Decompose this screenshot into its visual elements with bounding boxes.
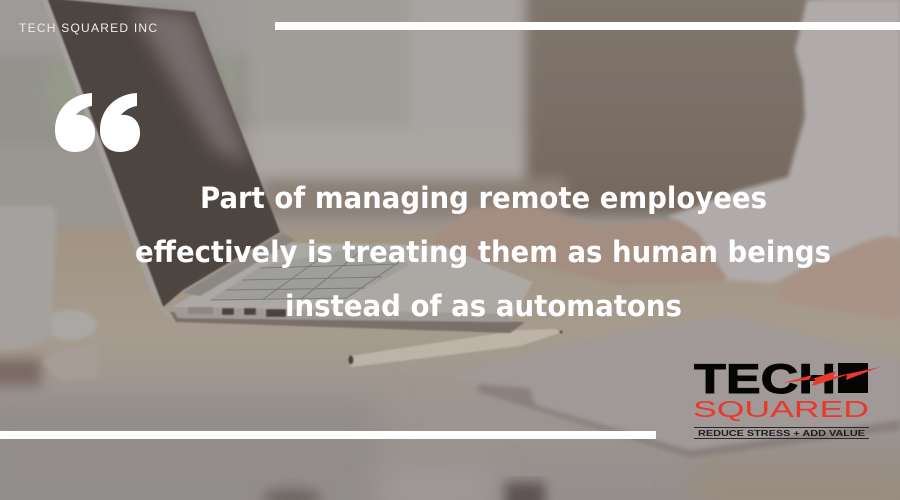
quote text: Part of managing remote employees <box>200 181 767 215</box>
logo tagline: REDUCE STRESS + ADD VALUE <box>698 429 866 438</box>
quote text <box>135 181 831 323</box>
quote text: effectively is treating them as human beings <box>135 235 831 269</box>
laptop <box>42 0 533 333</box>
bottom white rule <box>0 431 656 439</box>
quote text: instead of as automatons <box>285 289 682 323</box>
notebook <box>450 316 900 458</box>
logo black square <box>838 363 868 393</box>
hand on trackpad <box>428 205 727 285</box>
icon: quotation marks <box>55 93 140 152</box>
keyboard keys <box>210 252 405 300</box>
bottom dark blurs <box>262 482 545 500</box>
table bottom shading <box>0 400 900 500</box>
right hand <box>775 236 900 320</box>
cup <box>0 206 97 380</box>
sleeve and arm <box>667 0 900 283</box>
pen <box>348 329 562 367</box>
logo: Tech Squared <box>693 355 880 439</box>
top white rule <box>275 22 900 30</box>
logo wordmark TECH: TECH <box>694 355 836 402</box>
logo wordmark SQUARED: SQUARED <box>693 396 869 422</box>
laptop screen reflection <box>130 8 250 165</box>
top left label: TECH SQUARED INC <box>19 21 157 35</box>
icon: red lightning bolt <box>783 367 880 386</box>
